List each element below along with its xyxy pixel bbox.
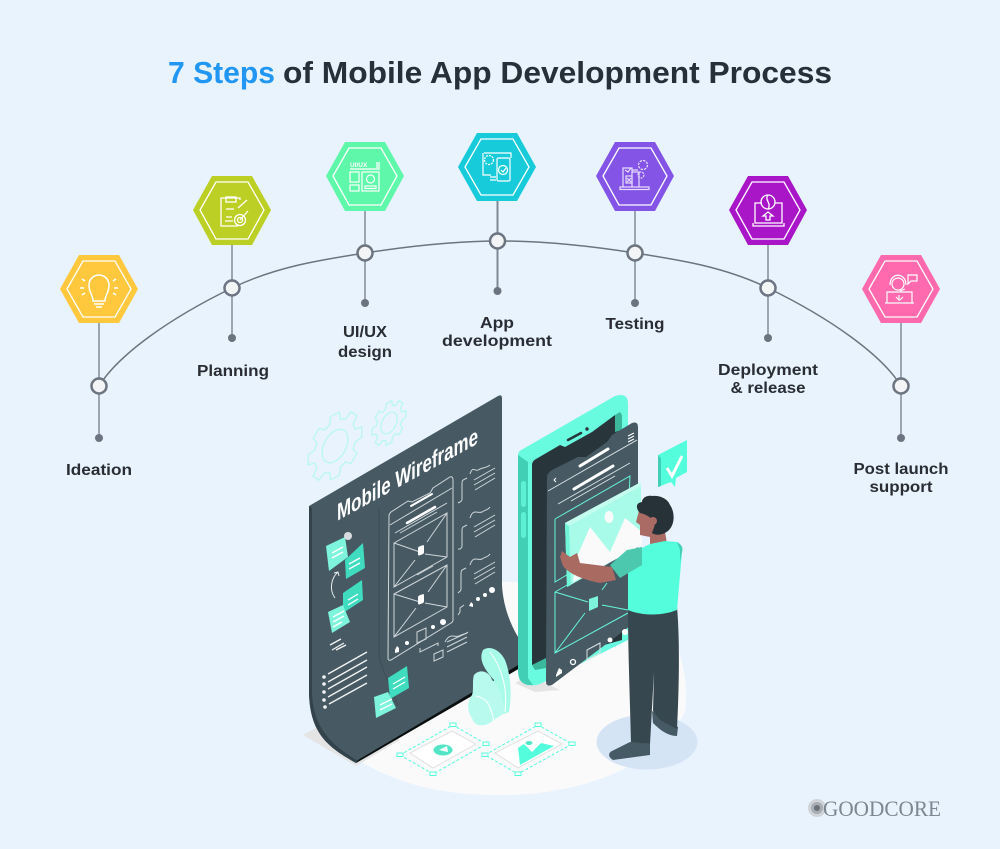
step 7: post launch support: support — [870, 479, 932, 496]
head — [636, 505, 667, 546]
timeline arc — [99, 241, 901, 386]
phone shadow — [515, 675, 560, 692]
step 4: app development — [442, 133, 552, 350]
step 7: post launch support — [854, 255, 948, 496]
bulleted text lines — [322, 639, 367, 709]
step 1: ideation — [60, 255, 138, 479]
person shadow — [596, 714, 698, 770]
step 2: planning: Planning — [197, 363, 269, 380]
plant — [468, 648, 511, 725]
step 5: testing: Testing — [606, 316, 664, 333]
wireframe board — [309, 395, 520, 763]
step 3: UI/UX design: UI/UX — [343, 324, 388, 341]
step 3: UI/UX design: design — [338, 344, 392, 361]
icon: gears — [308, 393, 406, 492]
step 2: planning — [193, 176, 271, 380]
media card: image — [482, 723, 575, 776]
step 3: UI/UX design: UI/UX — [350, 162, 368, 169]
step 3: UI/UX design — [326, 142, 404, 361]
wireframe phone outline — [388, 465, 495, 661]
step 6: deployment and release — [718, 176, 818, 397]
title: 7 Steps — [168, 55, 275, 90]
floating image card — [565, 482, 642, 587]
step 6: deployment and release: Deployment — [718, 362, 818, 379]
app screen panel — [546, 422, 638, 686]
torso — [628, 541, 682, 614]
mobile phone — [518, 395, 628, 685]
step 6: deployment and release: & release — [730, 380, 806, 397]
step 7: post launch support: Post launch — [854, 461, 948, 478]
step 4: app development: development — [442, 333, 552, 350]
person — [560, 482, 682, 760]
arm — [560, 551, 616, 583]
board shadow — [303, 712, 400, 766]
board heading: Mobile Wireframe — [337, 423, 478, 527]
step 4: app development: App — [480, 315, 514, 332]
logo: GOODCORE — [823, 796, 941, 821]
icon: check badge — [658, 440, 687, 487]
step 1: ideation: Ideation — [66, 462, 132, 479]
step 5: testing — [596, 142, 674, 333]
title: of Mobile App Development Process — [283, 55, 832, 90]
illustration floor — [340, 582, 686, 795]
media card: video — [397, 723, 489, 776]
sticky notes — [326, 532, 409, 718]
